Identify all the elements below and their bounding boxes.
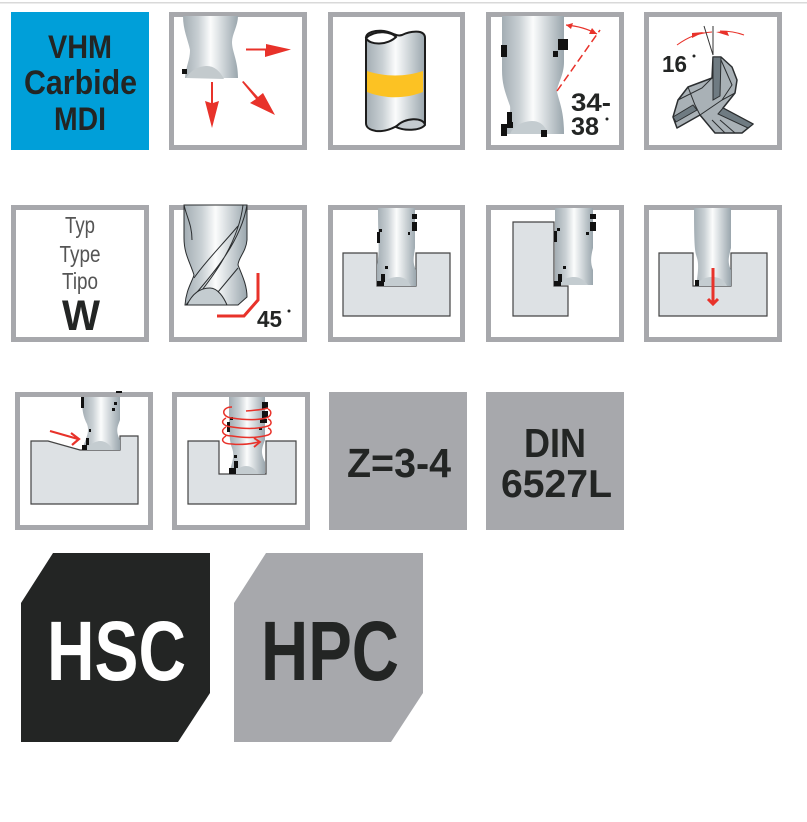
icon: Typ Type Tipo W: Tipo <box>62 268 98 294</box>
badge: Z=3-4: Z=3-4 <box>347 440 451 486</box>
icon: helix angle 34-38: 38 <box>571 113 599 141</box>
badge: VHM Carbide MDI <box>11 12 149 150</box>
icon: rake angle 16 <box>646 14 780 148</box>
icon: ramping <box>18 391 150 528</box>
icon: 45 degree chamfer: 45 <box>257 306 282 332</box>
badge: VHM Carbide MDI: MDI <box>54 101 106 137</box>
icon: shoulder milling <box>488 208 622 340</box>
badge: HSC: HSC <box>47 604 186 698</box>
badge: VHM Carbide MDI: VHM <box>48 29 112 65</box>
icon: cutting directions <box>172 14 304 148</box>
icon: Typ Type Tipo W: Type <box>60 241 100 267</box>
badge: VHM Carbide MDI: Carbide <box>24 64 137 102</box>
icon: helix angle 34-38: 34- <box>571 89 611 117</box>
icon: Typ Type Tipo W: Typ <box>65 212 95 238</box>
icon: plunge milling <box>646 208 780 340</box>
badge: HSC <box>21 553 210 742</box>
badge: HPC <box>234 553 423 742</box>
badge: DIN 6527L: DIN <box>524 420 586 466</box>
icon: Typ Type Tipo W: W <box>62 292 100 340</box>
icon: 45 degree chamfer <box>172 205 304 340</box>
icon: slot milling <box>330 208 462 340</box>
badge: HPC: HPC <box>261 604 399 698</box>
icon: Typ Type Tipo W <box>14 208 146 340</box>
icon: rake angle 16: 16 <box>662 51 687 77</box>
icon: coated shank <box>330 14 462 148</box>
badge: Z=3-4 <box>329 392 467 530</box>
icon: helical interpolation <box>174 394 308 528</box>
icon: helix angle 34-38 <box>488 14 622 148</box>
badge: DIN 6527L: 6527L <box>501 463 612 506</box>
badge: DIN 6527L <box>486 392 624 530</box>
